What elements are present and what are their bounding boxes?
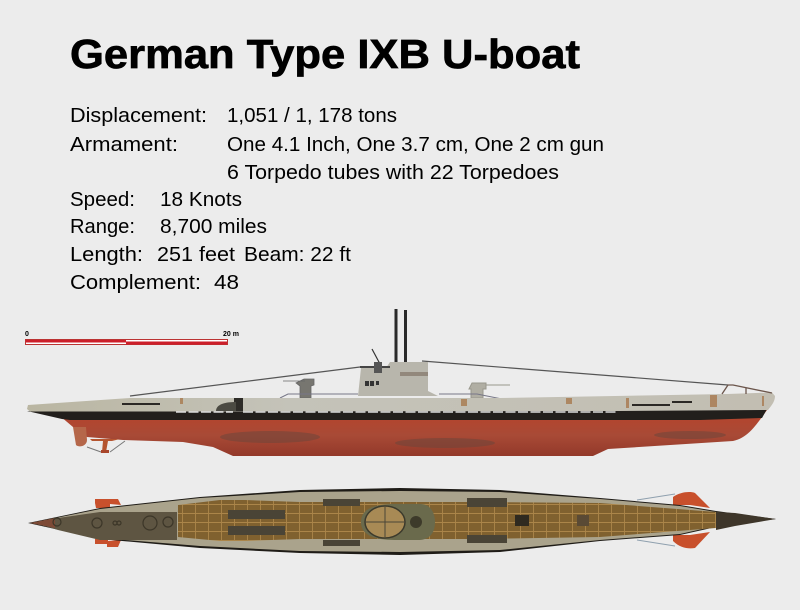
displacement spec: 1,051 / 1, 178 tons <box>227 105 397 127</box>
hydroplanes <box>95 492 710 548</box>
scale bar: 0 <box>25 331 29 338</box>
pale side casing <box>31 491 772 552</box>
armament spec: 6 Torpedo tubes with 22 Torpedoes <box>227 162 559 184</box>
side profile of submarine <box>27 309 775 456</box>
conning tower from above <box>361 504 435 540</box>
range spec: Range: <box>70 216 135 238</box>
range spec: 8,700 miles <box>160 216 267 238</box>
black waterline band <box>27 409 767 420</box>
dark hull shading <box>220 431 726 448</box>
periscopes <box>394 309 407 363</box>
speed spec: Speed: <box>70 189 135 211</box>
range spec <box>70 216 267 238</box>
rust streaks <box>180 395 764 408</box>
displacement spec <box>70 105 397 127</box>
forward dark casing <box>35 512 177 540</box>
forward deck fittings <box>53 516 173 530</box>
armament spec <box>70 134 604 184</box>
complement spec: Complement: <box>70 272 201 294</box>
outer hull outline <box>28 488 776 555</box>
displacement spec: Displacement: <box>70 105 207 127</box>
length and beam spec <box>70 244 351 266</box>
length and beam spec: Length: <box>70 244 143 266</box>
deck guns <box>280 379 510 399</box>
armament spec: Armament: <box>70 134 178 156</box>
specifications text block <box>70 105 604 294</box>
title: German Type IXB U-boat <box>70 31 580 77</box>
deck vents <box>176 411 618 413</box>
hydroplane stays <box>637 494 675 546</box>
armament spec: One 4.1 Inch, One 3.7 cm, One 2 cm gun <box>227 134 604 156</box>
jumping wires <box>130 361 728 396</box>
scale bar: 20 m <box>223 331 239 338</box>
length and beam spec: 251 feet <box>157 244 235 266</box>
length and beam spec: Beam: 22 ft <box>244 244 351 266</box>
wooden deck <box>178 500 716 541</box>
speed spec: 18 Knots <box>160 189 242 211</box>
hull red lower <box>60 410 767 456</box>
top view of submarine <box>28 488 776 555</box>
rudder and propeller <box>73 427 125 453</box>
bow rail <box>722 385 772 394</box>
deck hatches <box>228 498 589 546</box>
complement spec: 48 <box>214 272 239 294</box>
grey deck casing <box>27 392 775 412</box>
scale bar <box>25 331 239 344</box>
aft dark casing <box>716 512 776 530</box>
conning tower <box>358 349 438 396</box>
speed spec <box>70 189 242 211</box>
